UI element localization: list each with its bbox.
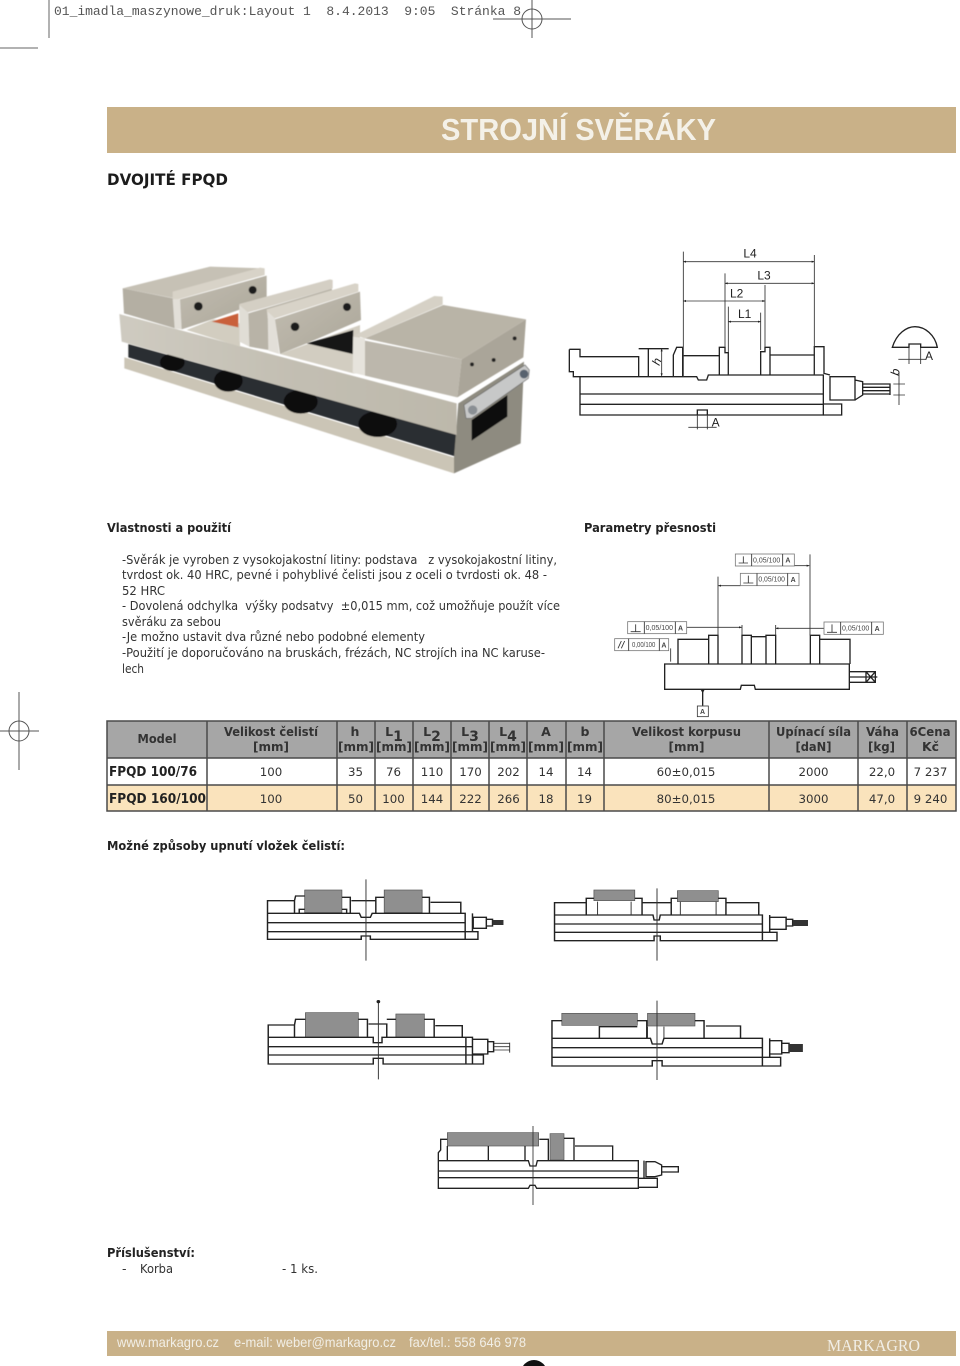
row: FPQD 100/76: 2000 bbox=[798, 765, 829, 779]
header labels: [mm] bbox=[528, 739, 564, 754]
photo: double vise bbox=[119, 267, 529, 473]
crop mark left bbox=[0, 692, 39, 770]
accessories text: Korba bbox=[140, 1261, 173, 1276]
header labels: Model bbox=[138, 731, 176, 746]
header labels: L bbox=[423, 724, 431, 739]
header labels bbox=[138, 724, 950, 754]
row: FPQD 100/76: 60±0,015 bbox=[657, 765, 715, 779]
table header background bbox=[107, 721, 956, 758]
description text: 52 HRC bbox=[122, 583, 165, 598]
header labels: [mm] bbox=[253, 739, 289, 754]
header labels: 2 bbox=[431, 729, 441, 745]
row: FPQD 160/100 bbox=[109, 792, 947, 807]
header labels: [mm] bbox=[668, 739, 704, 754]
diagram: jaw inserts option 3 bbox=[268, 1000, 510, 1079]
page number marker bbox=[521, 1360, 547, 1366]
row: FPQD 100/76: 7 237 bbox=[914, 765, 947, 779]
row: FPQD 160/100: 222 bbox=[459, 792, 482, 806]
header labels: [kg] bbox=[868, 739, 895, 754]
heading: jaw insert options: Možné způsoby upnutí vložek čelistí: bbox=[107, 838, 345, 853]
heading: properties: Vlastnosti a použití bbox=[107, 520, 232, 535]
header labels: 4 bbox=[507, 729, 517, 745]
header labels: L bbox=[385, 724, 393, 739]
header labels: b bbox=[581, 724, 590, 739]
row: FPQD 160/100: FPQD 160/100 bbox=[109, 792, 206, 807]
right block bbox=[365, 305, 526, 359]
interior floor bbox=[187, 319, 240, 347]
row: FPQD 160/100: 100 bbox=[260, 792, 282, 806]
description text: -Použití je doporučováno na bruskách, frézách, NC strojích ina NC karuse- bbox=[122, 645, 545, 660]
diagram: jaw inserts option 5 bbox=[438, 1126, 678, 1205]
header labels: Váha bbox=[866, 724, 899, 739]
header labels: 6Cena bbox=[910, 724, 950, 739]
subtitle: DVOJITÉ FPQD bbox=[107, 170, 228, 189]
technical drawing: precision parameters: A bbox=[700, 709, 705, 716]
header labels: 1 bbox=[393, 729, 403, 745]
description text: -Je možno ustavit dva různé nebo podobné elementy bbox=[122, 629, 426, 644]
row: FPQD 100/76: 170 bbox=[459, 765, 482, 779]
header labels: 3 bbox=[469, 729, 479, 745]
technical drawing: dimensions L1-L4 bbox=[569, 246, 937, 430]
technical drawing: dimensions L1-L4: h bbox=[649, 356, 665, 367]
heading: precision: Parametry přesnosti bbox=[584, 520, 716, 535]
highlighted row background bbox=[107, 785, 956, 811]
row: FPQD 100/76: 35 bbox=[348, 765, 363, 779]
accessories text: Příslušenství: bbox=[107, 1245, 195, 1260]
technical drawing: dimensions L1-L4: A bbox=[712, 416, 720, 430]
technical drawing: precision parameters: A bbox=[791, 577, 796, 584]
header labels: Kč bbox=[922, 739, 939, 754]
technical drawing: precision parameters: A bbox=[785, 558, 790, 565]
description text: lech bbox=[122, 661, 144, 676]
header labels: L bbox=[461, 724, 469, 739]
technical drawing: dimensions L1-L4: L2 bbox=[730, 286, 744, 300]
left block bbox=[123, 267, 263, 298]
title banner bbox=[107, 107, 956, 153]
header labels: A bbox=[541, 724, 551, 739]
technical drawing: dimensions L1-L4: L3 bbox=[757, 268, 771, 282]
header labels: Velikost korpusu bbox=[632, 724, 741, 739]
row: FPQD 160/100: 144 bbox=[421, 792, 443, 806]
header labels: L bbox=[499, 724, 507, 739]
header labels: Upínací síla bbox=[776, 724, 851, 739]
row: FPQD 160/100: 80±0,015 bbox=[657, 792, 715, 806]
latch bar bbox=[464, 365, 529, 418]
description text: tvrdost ok. 40 HRC, pevné i pohyblivé čelisti jsou z oceli o tvrdosti ok. 48 - bbox=[122, 567, 547, 582]
technical drawing: precision parameters: A bbox=[661, 642, 666, 649]
technical drawing: precision parameters: 0,05/100 bbox=[646, 625, 673, 632]
row: FPQD 100/76: 100 bbox=[260, 765, 282, 779]
crop mark top bbox=[493, 0, 571, 38]
description text: -Svěrák je vyroben z vysokojakostní litiny: podstava z vysokojakostní litiny, bbox=[122, 552, 557, 567]
footer band bbox=[107, 1331, 956, 1356]
technical drawing: precision parameters bbox=[615, 554, 883, 717]
header labels: [mm] bbox=[414, 739, 450, 754]
specifications table bbox=[107, 721, 956, 811]
header labels: [mm] bbox=[376, 739, 412, 754]
header labels: Velikost čelistí bbox=[224, 724, 319, 739]
footer band: fax/tel.: 558 646 978 bbox=[409, 1334, 526, 1350]
row: FPQD 160/100: 50 bbox=[348, 792, 363, 806]
technical drawing: dimensions L1-L4: L4 bbox=[743, 246, 757, 260]
diagram: jaw inserts option 4 bbox=[552, 1001, 803, 1080]
header labels: [mm] bbox=[567, 739, 603, 754]
footer band: www.markagro.cz bbox=[116, 1334, 219, 1350]
diagram: jaw inserts option 2 bbox=[555, 888, 808, 961]
accessories text bbox=[107, 1245, 318, 1276]
header labels: [mm] bbox=[338, 739, 374, 754]
technical drawing: precision parameters: 0,05/100 bbox=[753, 557, 780, 564]
header labels: [daN] bbox=[796, 739, 832, 754]
title banner: STROJNÍ SVĚRÁKY bbox=[441, 111, 716, 147]
header labels: h bbox=[351, 724, 359, 739]
row: FPQD 160/100: 266 bbox=[497, 792, 520, 806]
technical drawing: precision parameters: 0,00/100 bbox=[632, 642, 655, 649]
row: FPQD 100/76 bbox=[109, 765, 947, 780]
description text bbox=[122, 552, 560, 676]
row: FPQD 160/100: 3000 bbox=[798, 792, 829, 806]
row: FPQD 100/76: FPQD 100/76 bbox=[109, 765, 197, 780]
technical drawing: dimensions L1-L4: b bbox=[888, 367, 903, 377]
row: FPQD 160/100: 100 bbox=[382, 792, 405, 806]
row: FPQD 100/76: 14 bbox=[577, 765, 592, 779]
row: FPQD 100/76: 202 bbox=[497, 765, 520, 779]
accessories text: - 1 ks. bbox=[282, 1261, 318, 1276]
technical drawing: dimensions L1-L4: A bbox=[925, 349, 933, 363]
print slug line bbox=[0, 0, 521, 48]
footer band: e-mail: weber@markagro.cz bbox=[234, 1334, 396, 1350]
row: FPQD 160/100: 9 240 bbox=[914, 792, 947, 806]
description text: - Dovolená odchylka výšky podsatvy ±0,015 mm, což umožňuje použít více bbox=[122, 598, 560, 613]
technical drawing: precision parameters: 0,05/100 bbox=[842, 626, 869, 633]
header labels: [mm] bbox=[490, 739, 526, 754]
middle block A bbox=[239, 279, 333, 313]
technical drawing: precision parameters: A bbox=[678, 625, 683, 632]
technical drawing: dimensions L1-L4: L1 bbox=[738, 307, 752, 321]
row: FPQD 160/100: 19 bbox=[577, 792, 592, 806]
middle block B bbox=[267, 283, 358, 318]
technical drawing: precision parameters: 0,05/100 bbox=[758, 577, 785, 584]
row: FPQD 100/76: 22,0 bbox=[869, 765, 895, 779]
row: FPQD 100/76: 14 bbox=[538, 765, 554, 779]
description text: svěráku za sebou bbox=[122, 614, 221, 629]
accessories text: - bbox=[122, 1261, 127, 1276]
table grid bbox=[107, 721, 956, 811]
footer band: MARKAGRO bbox=[827, 1336, 920, 1355]
diagram: jaw inserts option 1 bbox=[268, 879, 503, 961]
row: FPQD 160/100: 47,0 bbox=[869, 792, 895, 806]
row: FPQD 100/76: 76 bbox=[386, 765, 401, 779]
technical drawing: precision parameters: A bbox=[875, 626, 880, 633]
row: FPQD 100/76: 110 bbox=[421, 765, 443, 779]
row: FPQD 160/100: 18 bbox=[538, 792, 554, 806]
header labels: [mm] bbox=[452, 739, 488, 754]
print slug line: 01_imadla_maszynowe_druk:Layout 1 8.4.2013 9:05 Stránka 8 bbox=[54, 4, 521, 19]
